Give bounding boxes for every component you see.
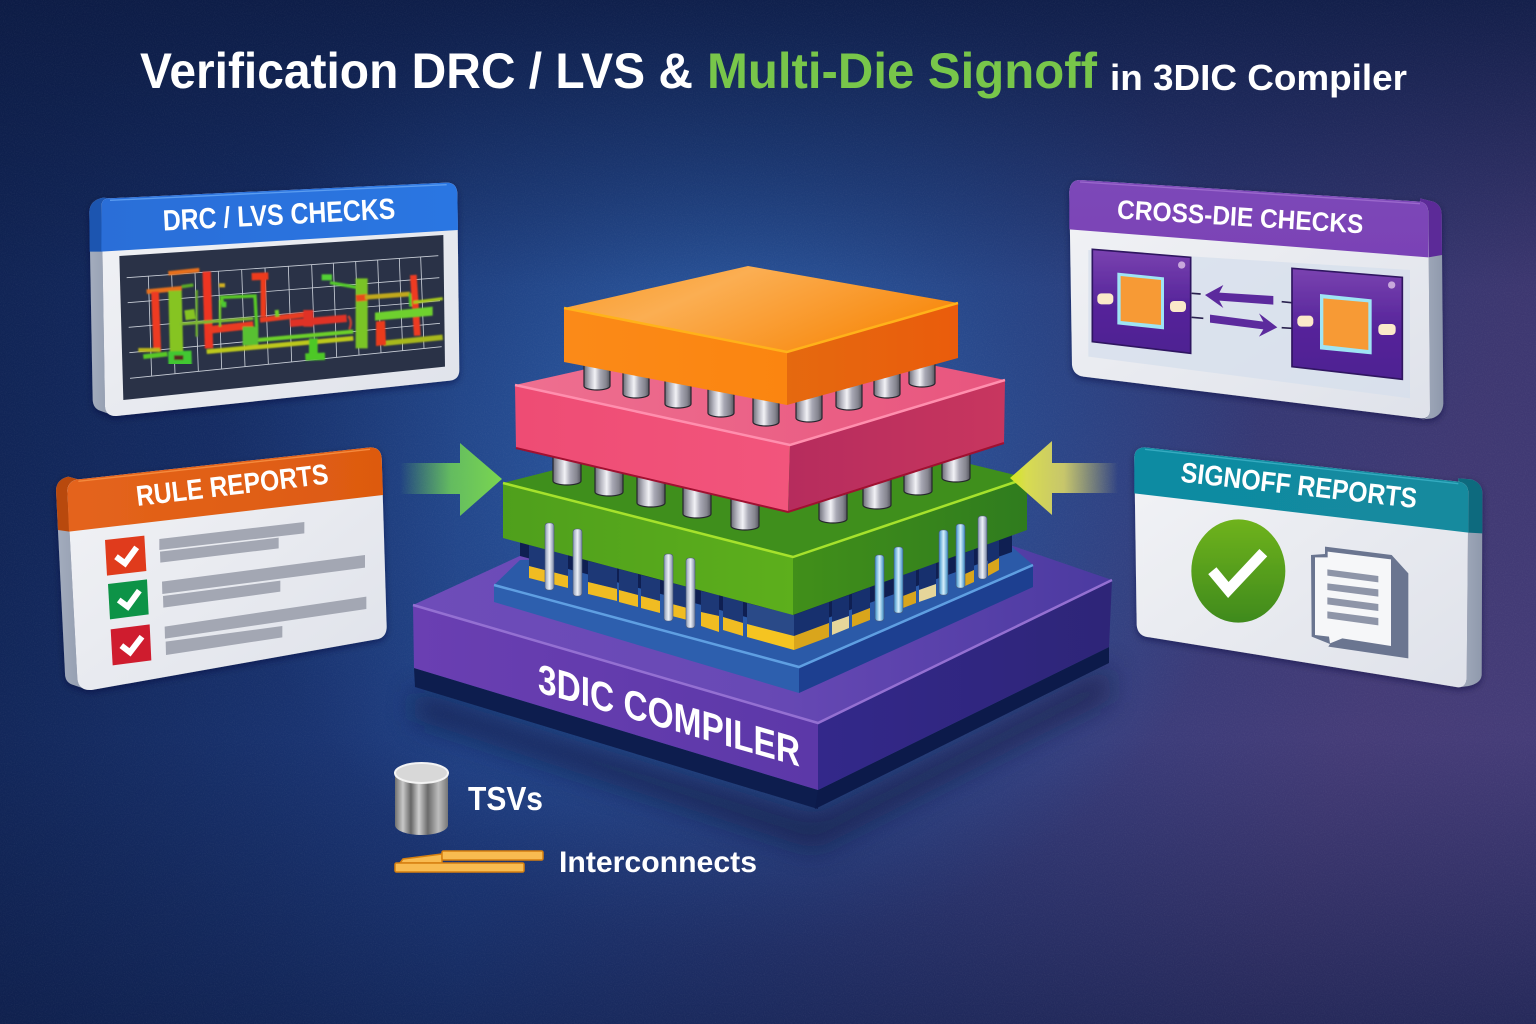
green die <box>503 415 1027 615</box>
label: TSVs <box>468 780 543 817</box>
blue substrate <box>494 545 1033 693</box>
arrow: yellow pointing to stack <box>1010 441 1118 515</box>
vertical through-silicon pins <box>545 516 987 628</box>
panel: rule reports <box>56 447 387 690</box>
layout screen <box>119 235 445 400</box>
check row 2 <box>108 555 365 619</box>
TSV pillars: green to pink <box>553 440 970 530</box>
micro-bump layer <box>520 530 1012 650</box>
legend: interconnects <box>395 846 757 879</box>
icon: TSV cylinder <box>395 763 448 835</box>
header bar <box>101 183 458 252</box>
3D die stack <box>413 266 1112 850</box>
orange die <box>564 266 958 405</box>
title: Verification DRC / LVS & <box>140 43 693 99</box>
title: in 3DIC Compiler <box>1110 57 1407 98</box>
header bar <box>67 447 383 532</box>
label: Interconnects <box>559 846 757 879</box>
icon: report document <box>1311 547 1408 658</box>
title: Multi-Die Signoff <box>707 43 1097 99</box>
heading: SIGNOFF REPORTS <box>1179 457 1419 515</box>
icon: green check disc <box>1191 519 1285 623</box>
panel: cross-die checks <box>1069 180 1443 419</box>
title <box>140 43 1407 99</box>
die chip right <box>1292 268 1402 379</box>
legend: TSVs <box>395 763 543 835</box>
platform: 3DIC Compiler base <box>413 545 1112 809</box>
pink die <box>515 330 1005 512</box>
arrow: green pointing to stack <box>400 443 502 516</box>
icon: interconnect bars <box>395 851 543 872</box>
header bar <box>1069 180 1428 257</box>
check row 3 <box>111 597 366 665</box>
label: 3DIC Compiler: 3DIC COMPILER <box>538 655 800 775</box>
heading: RULE REPORTS <box>134 459 330 513</box>
heading: CROSS-DIE CHECKS <box>1116 194 1364 239</box>
check row 1 <box>105 522 304 576</box>
die chip left <box>1092 249 1191 353</box>
panel: signoff reports <box>1134 447 1482 687</box>
base shadow <box>415 665 1110 850</box>
panel: DRC / LVS checks <box>89 183 459 416</box>
heading: DRC / LVS CHECKS <box>162 193 396 238</box>
arrows between dies <box>1192 285 1292 337</box>
TSV pillars: pink to orange <box>584 350 935 426</box>
header bar <box>1134 447 1468 533</box>
